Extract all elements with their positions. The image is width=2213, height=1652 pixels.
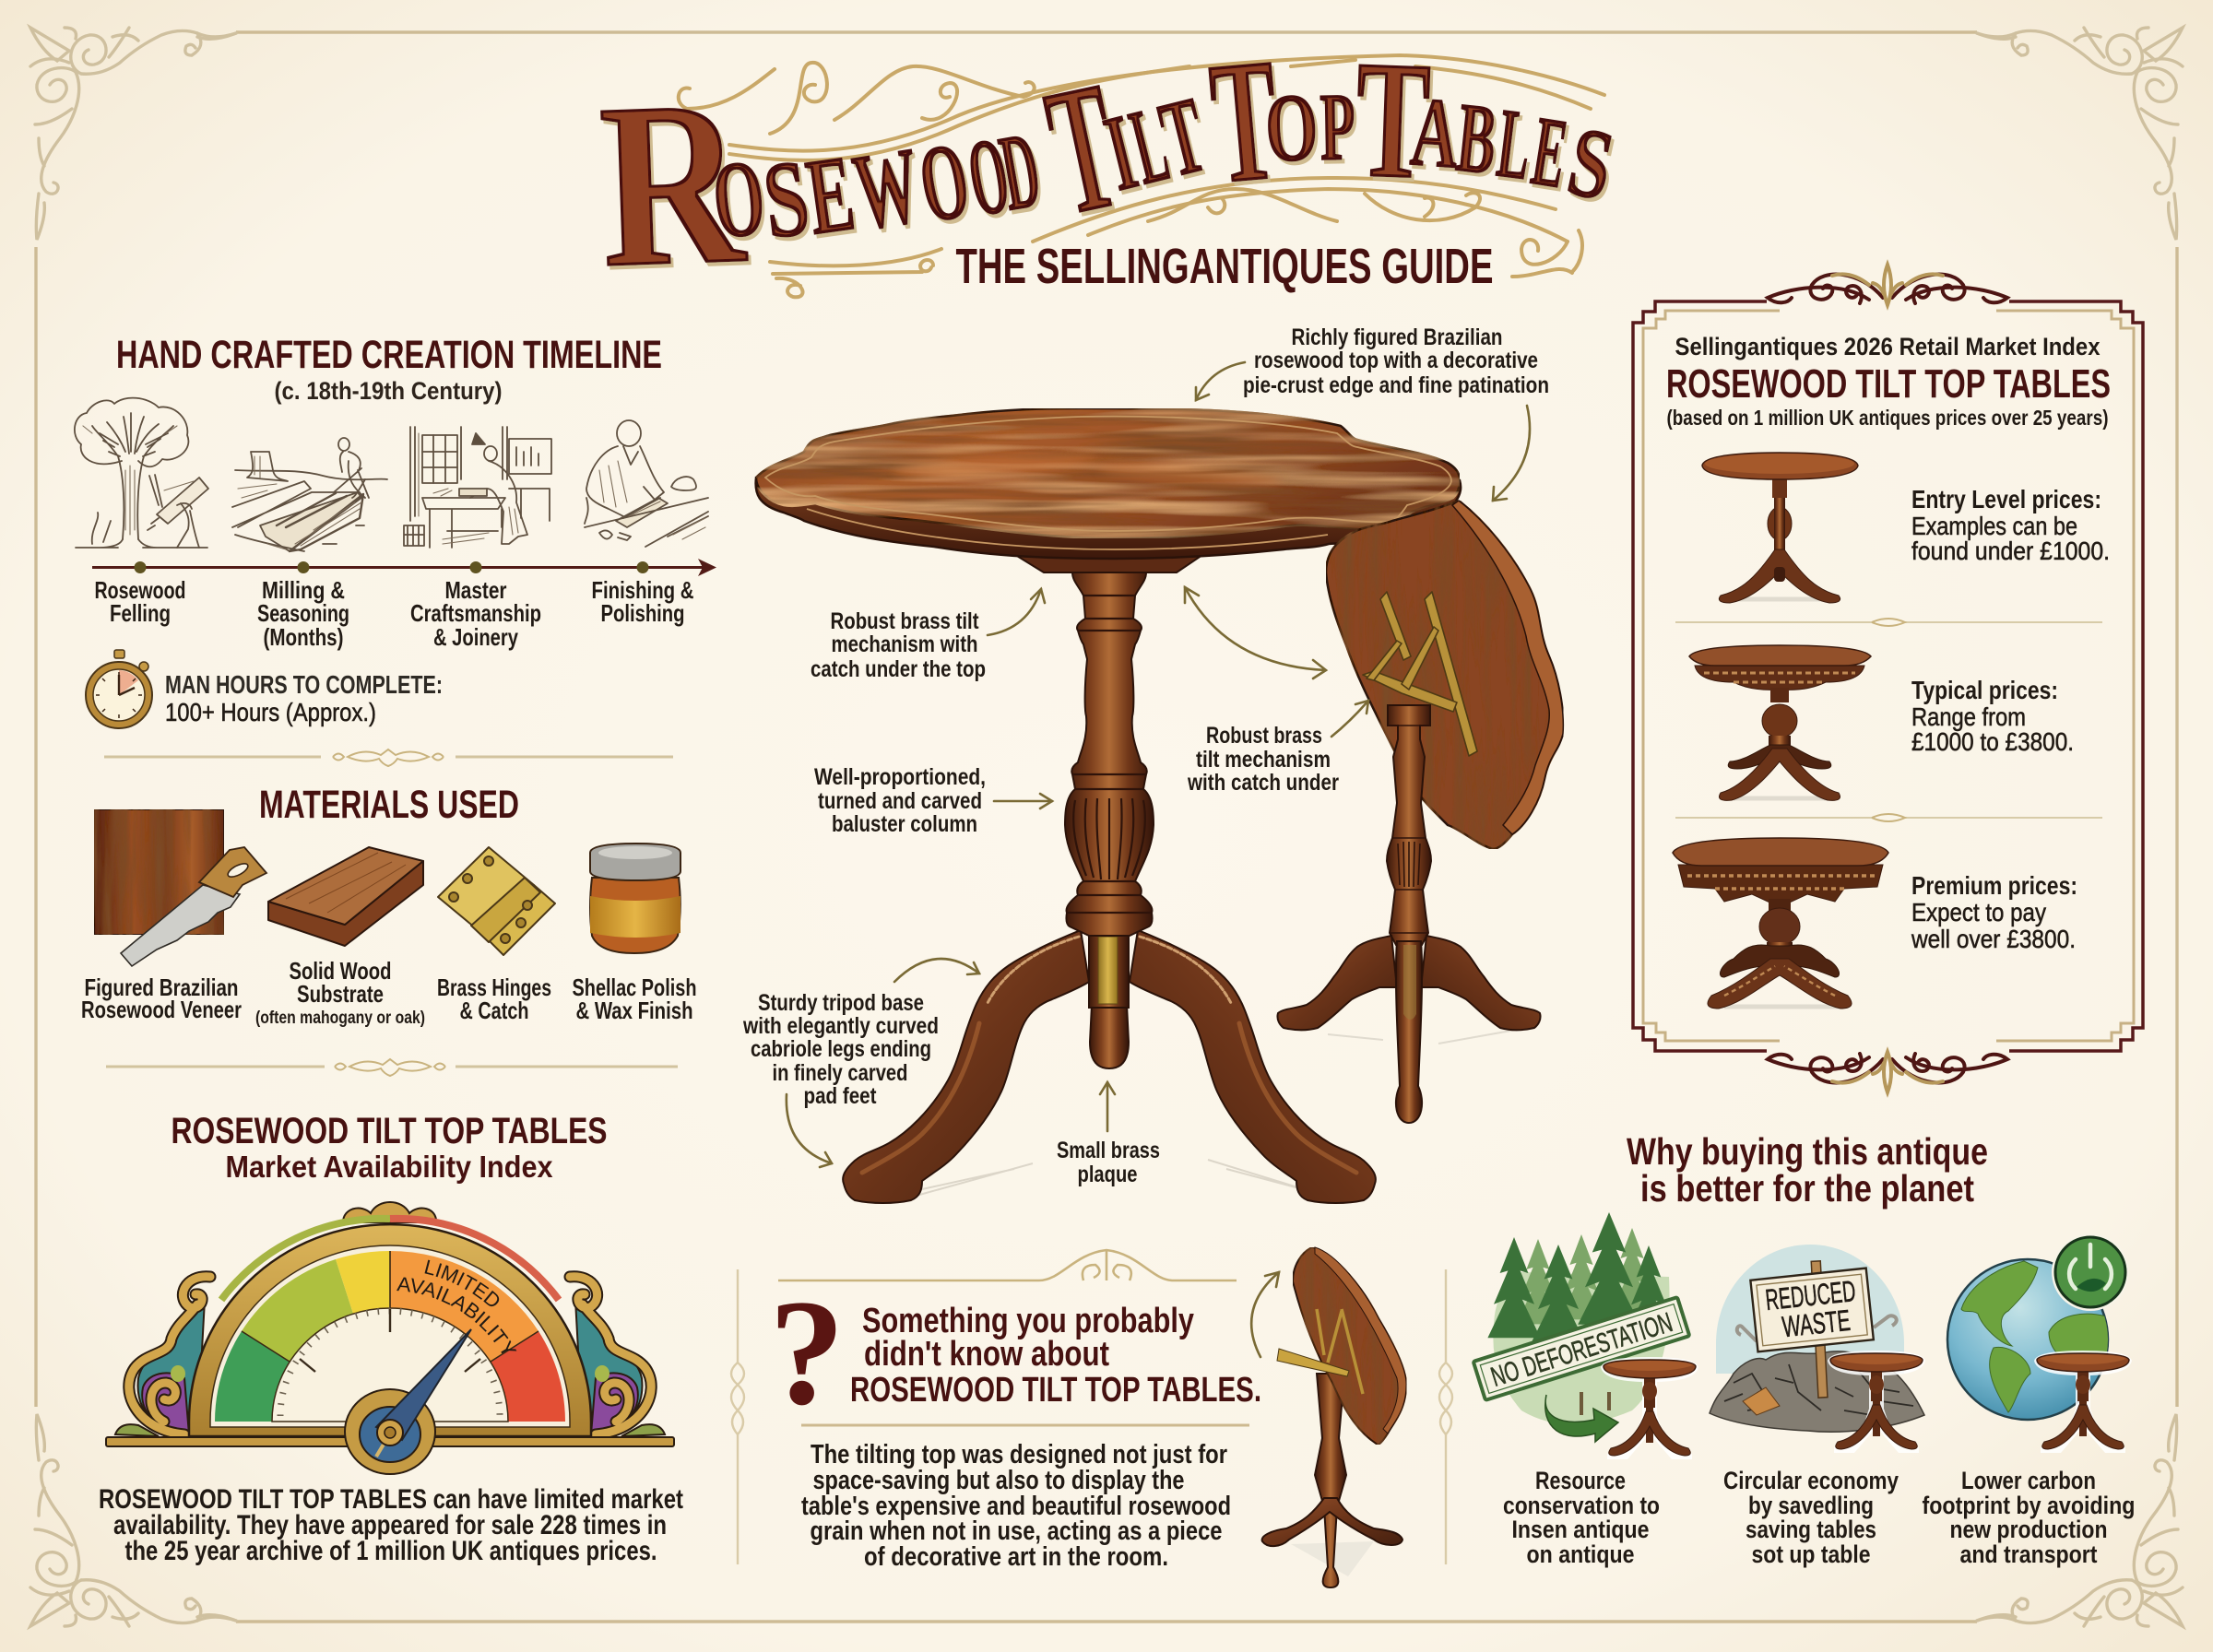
materials heading: MATERIALS USED	[259, 783, 519, 827]
fact body text: of decorative art in the room.	[864, 1542, 1168, 1572]
gauge frame	[189, 1224, 591, 1436]
annotation: top: pie-crust edge and fine patination	[1243, 372, 1549, 398]
label: substrate	[255, 957, 425, 1028]
title: B	[1451, 82, 1502, 196]
brass tilt mechanism	[1363, 592, 1477, 756]
icon: green badge	[2052, 1233, 2129, 1311]
annotation: baluster column: baluster column	[832, 811, 977, 837]
leg highlights and carving	[862, 937, 1356, 1173]
sketch: milling and seasoning	[232, 438, 387, 551]
availability description	[99, 1484, 683, 1566]
annotation: brass tilt mechanism: catch under the top	[811, 656, 986, 682]
annotation: side mechanism: with catch under	[1187, 770, 1339, 796]
planet label 1: Resource	[1535, 1467, 1626, 1494]
label: hinges	[437, 974, 551, 1024]
fact heading: ROSEWOOD TILT TOP TABLES.	[850, 1371, 1261, 1410]
fact heading: didn't know about	[864, 1335, 1109, 1374]
typical prices: £1000 to £3800.	[1911, 727, 2074, 756]
side floor shadow	[1328, 1029, 1521, 1044]
annotation: brass tilt mechanism: mechanism with	[832, 631, 977, 657]
timeline arrow	[92, 559, 716, 576]
panel: did you know	[731, 1247, 1452, 1587]
question mark icon: ?	[769, 1269, 845, 1436]
section vertical rules	[731, 1269, 1452, 1564]
subtitle: THE SELLINGANTIQUES GUIDE	[955, 239, 1494, 294]
annotation: brass tilt mechanism	[811, 608, 986, 682]
icon: stopwatch	[86, 650, 152, 728]
planet label 2: sot up table	[1752, 1540, 1870, 1568]
step label: milling: Milling &	[262, 576, 345, 604]
entry prices: Entry Level prices:	[1911, 485, 2101, 513]
title: T	[1203, 23, 1285, 221]
label: polish: Shellac Polish	[572, 974, 697, 1001]
entry prices: Examples can be	[1911, 512, 2077, 540]
premium prices: Expect to pay	[1911, 898, 2046, 926]
fact body text: table's expensive and beautiful rosewood	[801, 1492, 1231, 1521]
title: T	[1353, 25, 1433, 215]
title	[596, 23, 1623, 317]
title: S	[1559, 104, 1623, 222]
typical prices: Typical prices:	[1911, 676, 2058, 704]
side column	[1387, 705, 1431, 945]
label: substrate: (often mahogany or oak)	[255, 1009, 425, 1028]
fact body text: The tilting top was designed not just for	[811, 1440, 1227, 1469]
availability subheading: Market Availability Index	[225, 1150, 553, 1184]
planet heading: is better for the planet	[1640, 1167, 1974, 1210]
panel: retail market index	[1633, 265, 2143, 1092]
top frame ornament	[1768, 265, 2007, 305]
annotation: baluster column: turned and carved	[818, 788, 982, 814]
availability gauge	[105, 1201, 675, 1475]
divider	[1675, 814, 2102, 821]
tilted top	[1326, 501, 1563, 849]
divider ornament	[104, 749, 673, 766]
planet label 3: Lower carbon	[1961, 1467, 2096, 1494]
gauge needle	[376, 1329, 471, 1457]
side base left leg	[1277, 936, 1397, 1030]
planet label 1: Insen antique	[1512, 1516, 1649, 1543]
premium prices: well over £3800.	[1911, 925, 2076, 953]
green arrow	[1545, 1395, 1618, 1442]
title: S	[757, 137, 815, 262]
typical table	[1689, 645, 1871, 800]
under-top block	[1012, 553, 1205, 572]
planet label 3: footprint by avoiding	[1922, 1492, 2136, 1519]
title: T	[1150, 74, 1217, 200]
table icon 1	[1601, 1357, 1698, 1459]
title: R	[596, 51, 750, 317]
planet label 3	[1922, 1467, 2136, 1568]
index heading: (based on 1 million UK antiques prices over 25 years)	[1667, 406, 2108, 430]
column turnings and fluting	[1067, 596, 1152, 913]
annotation: side mechanism: tilt mechanism	[1196, 747, 1331, 773]
annotation: tripod base: in finely carved	[773, 1060, 907, 1086]
step label: rosewood felling	[94, 576, 186, 627]
premium prices	[1911, 871, 2077, 953]
premium table	[1673, 838, 1888, 1009]
gauge label: AVAILABILITY	[396, 1278, 516, 1353]
table top lower moulding line	[807, 509, 1328, 549]
label: substrate: Substrate	[297, 980, 384, 1008]
step label: finishing: Finishing &	[592, 576, 693, 604]
title: E	[1525, 97, 1574, 209]
panel: better for the planet	[1473, 1130, 2136, 1568]
title: W	[846, 124, 928, 253]
table annotations	[742, 324, 1549, 1187]
annotation: tripod base: cabriole legs ending	[751, 1036, 931, 1062]
step label: milling: Seasoning	[257, 599, 349, 627]
label: hinges: & Catch	[459, 997, 529, 1024]
label: veneer: Figured Brazilian	[85, 974, 238, 1001]
side column fluting	[1388, 726, 1430, 933]
icon: reduced waste	[1710, 1245, 1924, 1432]
title: O	[960, 114, 1017, 239]
arrow: feet	[787, 1094, 832, 1167]
side base right leg	[1421, 936, 1541, 1030]
sketch: master craftsmanship	[404, 427, 551, 548]
planet label 2: Circular economy	[1723, 1467, 1899, 1494]
arrow: top right	[1493, 406, 1530, 501]
title: T	[1032, 43, 1134, 254]
planet label 1	[1503, 1467, 1660, 1568]
waste sign post	[1811, 1261, 1828, 1398]
table icon 2	[1828, 1351, 1925, 1453]
icon: globe	[1947, 1259, 2112, 1420]
sketch: finishing and polishing	[585, 420, 708, 547]
planet label 2: by savedling	[1748, 1492, 1874, 1519]
arrow: plaque	[1100, 1082, 1115, 1131]
left cabriole leg	[843, 930, 1089, 1203]
step label: rosewood felling: Felling	[110, 599, 171, 627]
title: O	[911, 119, 977, 246]
planet heading	[1627, 1130, 1988, 1210]
gauge hub	[345, 1389, 435, 1474]
step label: craftsmanship: Master	[444, 576, 507, 604]
man hours text: MAN HOURS TO COMPLETE:	[165, 670, 443, 699]
planet label 2	[1723, 1467, 1899, 1568]
title: A	[1407, 75, 1462, 189]
annotation: top: Richly figured Brazilian	[1291, 324, 1503, 350]
gauge dial	[272, 1308, 508, 1422]
man hours text	[165, 670, 443, 726]
title: O	[1262, 72, 1320, 183]
panel: market availability	[99, 1111, 683, 1566]
brass plaque	[1098, 937, 1118, 1004]
section top ornament	[778, 1249, 1237, 1280]
step label: craftsmanship: Craftsmanship	[410, 599, 541, 627]
panel: creation timeline	[75, 333, 716, 728]
icon: veneer and saw	[94, 809, 266, 966]
index heading	[1666, 333, 2111, 430]
table icon 3	[2034, 1351, 2132, 1453]
gauge label: LIMITED	[424, 1259, 500, 1307]
fact body text: space-saving but also to display the	[813, 1466, 1184, 1495]
planet label 1: conservation to	[1503, 1492, 1660, 1519]
gauge side scrolls	[115, 1277, 665, 1436]
sketch: rosewood felling	[75, 398, 208, 548]
waste sign	[1750, 1268, 1874, 1351]
title: I	[1095, 90, 1147, 214]
label: substrate: Solid Wood	[290, 957, 391, 985]
typical prices: Range from	[1911, 702, 2026, 731]
title: P	[1319, 73, 1356, 181]
arrow: legs	[894, 959, 979, 982]
fact body text	[801, 1440, 1231, 1572]
annotation: top	[1243, 324, 1549, 398]
step label: craftsmanship	[410, 576, 541, 651]
step label: rosewood felling: Rosewood	[94, 576, 186, 604]
icon: wood plank	[268, 847, 423, 946]
availability heading: ROSEWOOD TILT TOP TABLES	[172, 1111, 607, 1151]
table top surface	[756, 408, 1460, 538]
annotation: side mechanism	[1187, 723, 1339, 796]
planet heading: Why buying this antique	[1627, 1130, 1988, 1173]
baluster column	[1065, 572, 1154, 936]
label: polish	[572, 974, 697, 1024]
man hours text: 100+ Hours (Approx.)	[165, 698, 376, 726]
index heading: Sellingantiques 2026 Retail Market Index	[1675, 333, 2101, 360]
title: L	[1492, 88, 1537, 201]
label: veneer	[81, 974, 242, 1023]
label: hinges: Brass Hinges	[437, 974, 551, 1001]
gauge crown	[343, 1202, 436, 1222]
main tilt top table	[756, 408, 1461, 1203]
floor shadows	[913, 1160, 1328, 1197]
fact heading: Something you probably	[862, 1302, 1194, 1340]
step label: craftsmanship: & Joinery	[433, 623, 518, 651]
planet label 2: saving tables	[1746, 1516, 1876, 1543]
arrow: to tilted table	[1251, 1272, 1279, 1357]
title: O	[707, 137, 771, 263]
step label: finishing	[592, 576, 693, 627]
gauge colour bands	[215, 1251, 565, 1422]
arrow: column	[994, 794, 1052, 808]
annotation: brass plaque: Small brass	[1057, 1138, 1160, 1163]
annotation: top: rosewood top with a decorative	[1254, 348, 1538, 373]
no deforestation banner	[1473, 1297, 1689, 1400]
annotation: tripod base: pad feet	[804, 1083, 877, 1109]
table top rim	[756, 478, 1461, 559]
tilted side table	[1277, 501, 1563, 1123]
icon: brass hinge	[438, 847, 555, 955]
annotation: tripod base	[742, 990, 939, 1109]
small tilted table	[1262, 1247, 1406, 1587]
step label: finishing: Polishing	[601, 599, 684, 627]
title: L	[1119, 83, 1178, 207]
icon: no deforestation forest	[1473, 1212, 1689, 1442]
timeline heading: HAND CRAFTED CREATION TIMELINE	[116, 333, 662, 377]
right cabriole leg	[1130, 930, 1376, 1203]
index frame	[1633, 301, 2143, 1051]
title flourishes	[679, 55, 1604, 297]
annotation: baluster column: Well-proportioned,	[814, 764, 986, 790]
entry prices	[1911, 485, 2110, 565]
waste sign: WASTE	[1781, 1304, 1852, 1343]
annotation: baluster column	[814, 764, 986, 837]
annotation: tripod base: Sturdy tripod base	[758, 990, 924, 1016]
fact heading	[850, 1302, 1261, 1410]
divider ornament	[106, 1059, 678, 1076]
centre block	[1089, 933, 1129, 1008]
icon: shellac jar	[590, 844, 680, 953]
planet label 3: new production	[1949, 1516, 2108, 1543]
arrow: top left	[1196, 362, 1245, 400]
arrow: double headed comparison	[1185, 587, 1326, 678]
annotation: brass plaque	[1057, 1138, 1160, 1187]
back leg	[1090, 1005, 1129, 1068]
arrow: tilt mechanism	[988, 589, 1045, 635]
step label: milling: (Months)	[264, 623, 343, 651]
annotation: brass tilt mechanism: Robust brass tilt	[830, 608, 979, 634]
arrow: side mechanism	[1331, 701, 1368, 737]
timeline period: (c. 18th-19th Century)	[275, 377, 502, 405]
entry table	[1702, 453, 1858, 603]
annotation: tripod base: with elegantly curved	[742, 1013, 939, 1039]
title: D	[992, 108, 1048, 233]
planet label 3: and transport	[1960, 1540, 2098, 1568]
panel: materials used	[81, 783, 697, 1028]
gauge top colour trim	[221, 1219, 559, 1300]
availability description: the 25 year archive of 1 million UK antiques prices.	[125, 1536, 657, 1566]
divider	[1675, 619, 2102, 626]
waste sign: REDUCED	[1764, 1274, 1857, 1316]
gauge base	[106, 1437, 674, 1446]
brass strap on side leg	[1403, 945, 1416, 1020]
step label: milling	[257, 576, 349, 651]
annotation: brass plaque: plaque	[1077, 1162, 1138, 1187]
annotation: side mechanism: Robust brass	[1206, 723, 1322, 749]
title: E	[800, 134, 861, 258]
availability description: availability. They have appeared for sale 228 times in	[113, 1510, 667, 1540]
availability description: ROSEWOOD TILT TOP TABLES can have limited market	[99, 1484, 683, 1515]
planet label 1: on antique	[1527, 1540, 1634, 1568]
label: polish: & Wax Finish	[575, 997, 693, 1024]
entry prices: found under £1000.	[1911, 537, 2110, 565]
side front leg	[1396, 941, 1422, 1123]
typical prices	[1911, 676, 2074, 756]
premium prices: Premium prices:	[1911, 871, 2077, 900]
fact body text: grain when not in use, acting as a piece	[810, 1516, 1223, 1546]
label: veneer: Rosewood Veneer	[81, 996, 242, 1023]
bottom frame ornament	[1768, 1052, 2007, 1092]
no deforestation banner: NO DEFORESTATION	[1487, 1307, 1676, 1393]
